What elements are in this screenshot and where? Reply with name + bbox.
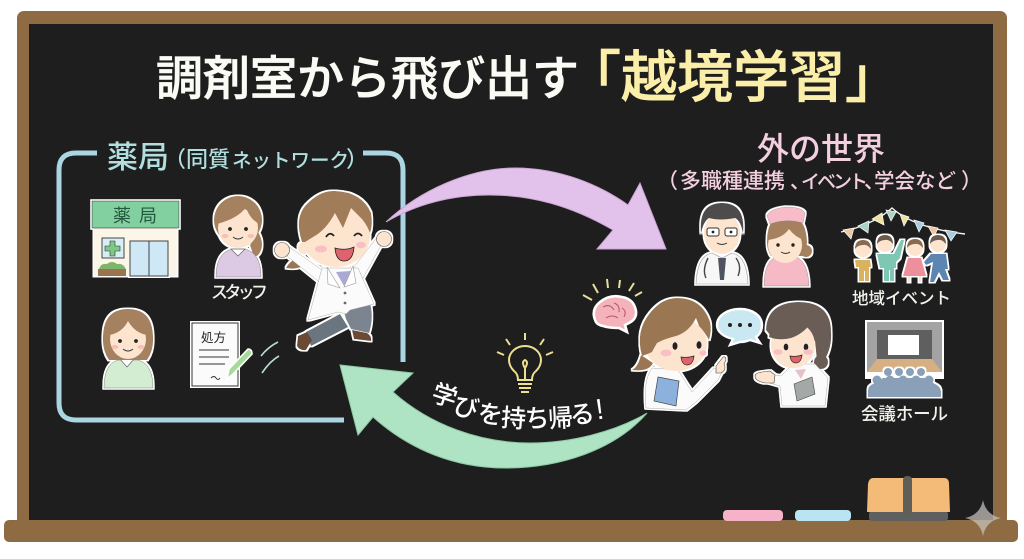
arrow label: る <box>568 400 596 430</box>
pink chalk <box>723 510 783 521</box>
icon: pharmacy building: 薬局 <box>113 206 165 226</box>
title <box>156 46 901 109</box>
arrow label: を <box>476 399 505 431</box>
icon: lightbulb idea <box>497 333 553 392</box>
icon: speech bubble <box>717 309 762 345</box>
panel heading: ネットワーク <box>232 150 349 172</box>
icon: jumping pharmacist <box>274 191 392 350</box>
icon: nurse <box>764 207 812 286</box>
heading: outside world: イベント <box>801 172 866 193</box>
icon: community event <box>841 208 965 282</box>
arrow: purple outbound <box>386 168 666 249</box>
label: conference hall: 会議ホール <box>861 404 948 424</box>
panel heading: （同質 <box>164 147 230 172</box>
heading: outside world: ） <box>961 170 982 193</box>
eraser <box>867 476 950 521</box>
chalk tray ledge <box>4 520 1018 542</box>
heading: outside world: 、 <box>864 171 884 193</box>
heading: outside world <box>657 131 982 193</box>
heading: outside world: 外の世界 <box>757 131 885 167</box>
icon: pharmacist explaining <box>632 298 726 410</box>
panel border <box>59 153 403 420</box>
arrow label: ち <box>524 405 550 433</box>
heading: outside world: 多職種連携 <box>680 170 785 193</box>
icon: doctor <box>696 203 748 284</box>
label: community event: 地域イベント <box>852 289 951 308</box>
event crowd <box>855 235 949 282</box>
icon: pharmacist listening <box>755 302 831 406</box>
arrow label: ! <box>594 394 606 426</box>
motion lines <box>261 342 279 373</box>
panel heading: ） <box>346 147 368 172</box>
panel heading: 薬局 <box>107 140 169 175</box>
sparkle watermark <box>965 500 1001 536</box>
audience <box>868 368 941 397</box>
title: 「越境学習」 <box>565 46 901 109</box>
heading: outside world: 、 <box>790 171 810 193</box>
icon: conference hall <box>865 320 944 397</box>
icon: staff member in green <box>103 309 153 388</box>
heading: outside world: （ <box>657 170 678 193</box>
arrow label: 学 <box>428 379 461 414</box>
arrow label: 帰 <box>547 404 574 434</box>
blue chalk <box>795 510 851 521</box>
icon: prescription and pen <box>190 321 252 388</box>
arrow label <box>428 379 606 434</box>
title: 調剤室から飛び出す <box>156 52 579 105</box>
icon: brain with rays <box>583 279 642 332</box>
arrow label: 持 <box>500 404 527 434</box>
icon: staff member <box>214 196 262 277</box>
heading: outside world: 学会など <box>874 170 956 193</box>
arrow: green return <box>340 365 647 468</box>
staff label: スタッフ <box>211 283 268 302</box>
icon: pharmacy building <box>92 201 179 276</box>
panel: pharmacy homogeneous network <box>59 140 403 420</box>
arrow label: び <box>450 392 481 425</box>
icon: prescription and pen: 処方 <box>201 330 226 345</box>
